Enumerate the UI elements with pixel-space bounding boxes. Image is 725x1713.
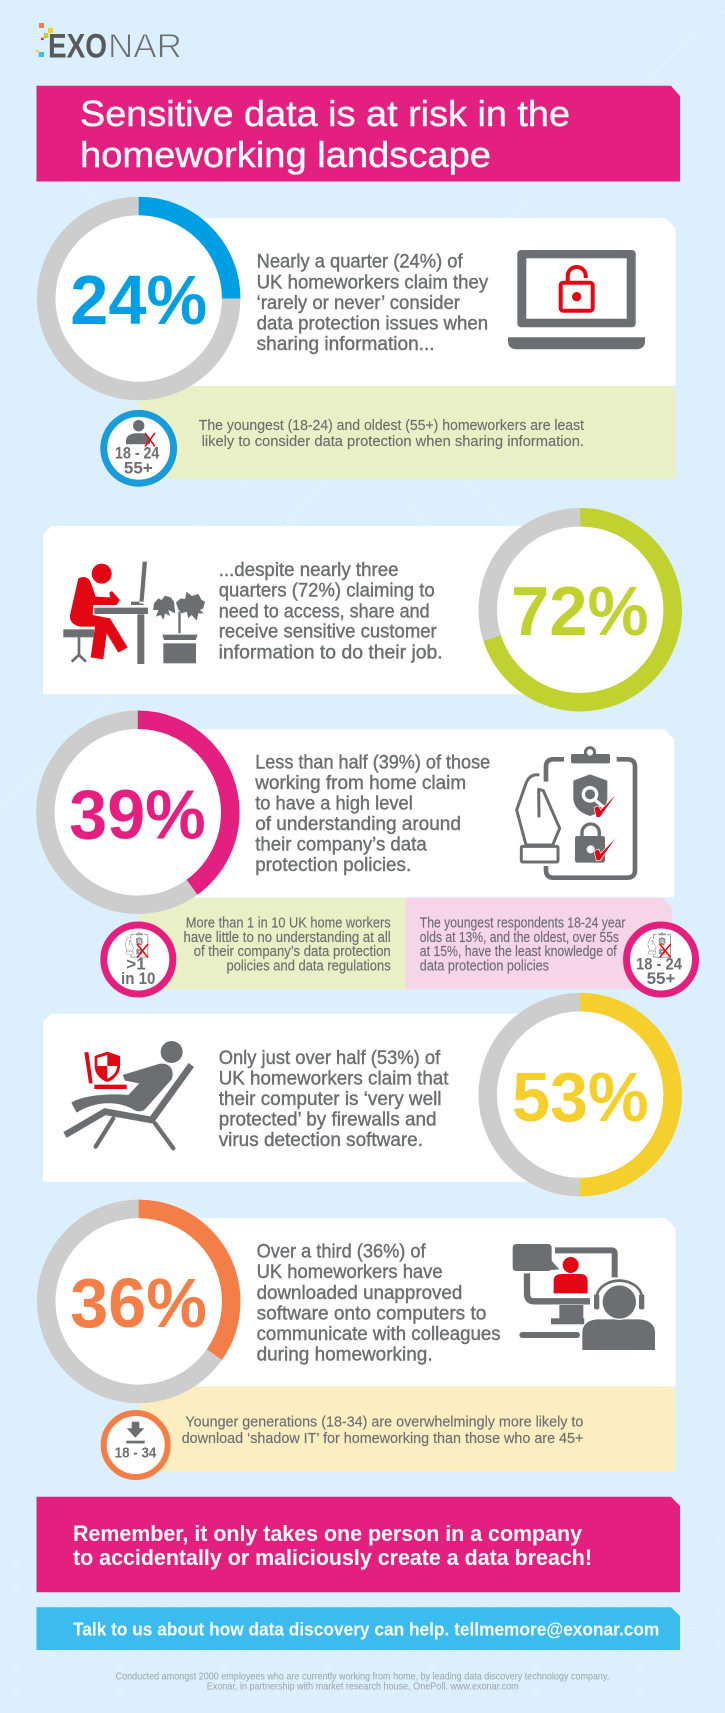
text: 24 percent statement: Nearly a quarter (24%) of <box>257 252 463 273</box>
badge: more than 1 in 10: in 10 <box>121 969 155 988</box>
text: 72 percent statement: quarters (72%) claiming to <box>219 581 435 602</box>
donut chart: 39 percent <box>45 720 230 905</box>
panel: 24 percent card <box>130 218 676 386</box>
panel: youngest and oldest note <box>406 898 672 989</box>
banner: contact <box>36 1607 680 1650</box>
text: 36 percent statement: Over a third (36%) of <box>257 1242 426 1263</box>
icon: person at desk with plant <box>63 562 205 664</box>
logo: Exonar: EXO <box>48 27 107 65</box>
panel: younger generations note: Younger generations (18-34) are overwhelmingly more likely to <box>185 1413 583 1430</box>
panel: younger generations note <box>139 1386 675 1471</box>
logo: Exonar <box>36 23 182 65</box>
panel: youngest and oldest note: The youngest respondents 18-24 year <box>420 916 626 932</box>
text: 24 percent statement: ‘rarely or never’ consider <box>257 293 461 314</box>
badge: 18-24 and 55+ policies: 55+ <box>647 969 675 988</box>
panel: younger generations note: download ‘shadow IT’ for homeworking than those who are 45+ <box>182 1430 584 1447</box>
panel: more than 1 in 10 note: policies and data regulations <box>226 958 391 974</box>
donut chart: 24 percent <box>46 206 231 391</box>
logo: Exonar: NAR <box>108 27 182 65</box>
text: 72 percent statement: information to do their job. <box>219 642 443 663</box>
badge: 18-24 and 55+ policies <box>626 925 696 994</box>
panel: age note 18-24 and 55+ <box>139 386 675 479</box>
text: 72 percent statement: receive sensitive customer <box>219 622 437 643</box>
text: 39 percent statement: working from home claim <box>254 773 466 794</box>
title banner <box>36 86 680 182</box>
donut chart: 53 percent: 53% <box>512 1058 649 1136</box>
text: 36 percent statement: UK homeworkers have <box>257 1262 443 1283</box>
panel: more than 1 in 10 note: More than 1 in 10 UK home workers <box>186 916 391 932</box>
text: 39 percent statement <box>254 752 490 876</box>
panel: 39 percent card <box>130 729 674 897</box>
badge: download 18-34: 18 - 34 <box>115 1444 157 1461</box>
donut chart: 39 percent: 39% <box>69 775 206 853</box>
text: 53 percent statement: Only just over half (53%) of <box>219 1048 441 1069</box>
panel: youngest and oldest note: olds at 13%, and the oldest, over 55s <box>420 930 619 946</box>
text: 24 percent statement: data protection issues when <box>257 313 488 334</box>
panel: more than 1 in 10 note <box>139 898 405 989</box>
donut chart: 24 percent: 24% <box>70 261 207 339</box>
text: 72 percent statement: need to access, share and <box>219 601 430 622</box>
text: 36 percent statement <box>257 1242 501 1366</box>
text: 72 percent statement: ...despite nearly three <box>219 560 398 581</box>
footnote <box>116 1670 609 1692</box>
donut chart: 36 percent <box>46 1209 231 1394</box>
panel: youngest and oldest note: data protection policies <box>420 958 549 974</box>
donut chart: 72 percent: 72% <box>511 572 649 650</box>
badge: 18-24 and 55+: 18 - 24 <box>115 443 160 462</box>
banner: contact: Talk to us about how data discovery can help. tellmemore@exonar.com <box>73 1620 659 1640</box>
text: 53 percent statement: UK homeworkers claim that <box>219 1068 449 1090</box>
text: 53 percent statement: virus detection software. <box>219 1130 423 1151</box>
text: 39 percent statement: Less than half (39%) of those <box>255 752 490 773</box>
panel: age note 18-24 and 55+: The youngest (18-24) and oldest (55+) homeworkers are least <box>199 417 585 434</box>
callout: reminder: Remember, it only takes one person in a company <box>73 1521 583 1546</box>
icon: laptop with open padlock <box>508 250 645 349</box>
donut chart: 72 percent <box>488 517 673 702</box>
panel: age note 18-24 and 55+: likely to consider data protection when sharing information. <box>202 433 584 450</box>
donut chart: 53 percent <box>488 1002 673 1187</box>
badge: more than 1 in 10: >1 <box>126 954 146 973</box>
callout: reminder <box>36 1497 680 1592</box>
title banner: Sensitive data is at risk in the <box>80 93 570 134</box>
text: 72 percent statement <box>219 560 443 663</box>
panel: 72 percent card <box>43 526 600 694</box>
panel: more than 1 in 10 note: of their company’s data protection <box>194 944 391 960</box>
text: 39 percent statement: protection policies. <box>255 855 411 876</box>
callout: reminder: to accidentally or maliciously create a data breach! <box>73 1545 592 1570</box>
text: 36 percent statement: software onto computers to <box>257 1304 486 1324</box>
text: 39 percent statement: their company’s data <box>255 835 427 856</box>
text: 53 percent statement <box>219 1048 449 1151</box>
panel: youngest and oldest note: at 15%, have the least knowledge of <box>420 944 618 960</box>
panel: 53 percent card <box>43 1014 600 1182</box>
text: 39 percent statement: to have a high level <box>255 794 413 815</box>
badge: 18-24 and 55+ <box>104 413 174 483</box>
text: 36 percent statement: downloaded unapproved <box>257 1283 462 1304</box>
badge: more than 1 in 10 <box>104 925 173 994</box>
text: 36 percent statement: during homeworking. <box>257 1344 433 1366</box>
text: 53 percent statement: their computer is ‘very well <box>219 1089 442 1110</box>
icon: video call with headset <box>513 1244 655 1350</box>
panel: 36 percent card <box>130 1218 676 1386</box>
text: 24 percent statement: sharing information... <box>257 334 435 355</box>
icon: person on lounger with laptop shield <box>65 1041 191 1148</box>
badge: 18-24 and 55+ policies: 18 - 24 <box>636 954 682 973</box>
badge: 18-24 and 55+: 55+ <box>124 458 153 477</box>
text: 24 percent statement <box>257 252 489 355</box>
text: 39 percent statement: of understanding around <box>255 814 461 835</box>
text: 53 percent statement: protected’ by firewalls and <box>219 1110 436 1130</box>
icon: hand with clipboard <box>517 748 635 878</box>
badge: download 18-34 <box>104 1413 168 1477</box>
panel: more than 1 in 10 note: have little to no understanding at all <box>184 930 391 946</box>
title banner: homeworking landscape <box>80 134 491 175</box>
text: 36 percent statement: communicate with colleagues <box>257 1324 501 1345</box>
footnote: Exonar, in partnership with market research house, OnePoll. www.exonar.com <box>207 1680 519 1692</box>
footnote: Conducted amongst 2000 employees who are currently working from home, by leading data discovery technology company, <box>116 1670 609 1682</box>
donut chart: 36 percent: 36% <box>70 1264 207 1342</box>
text: 24 percent statement: UK homeworkers claim they <box>257 272 489 293</box>
